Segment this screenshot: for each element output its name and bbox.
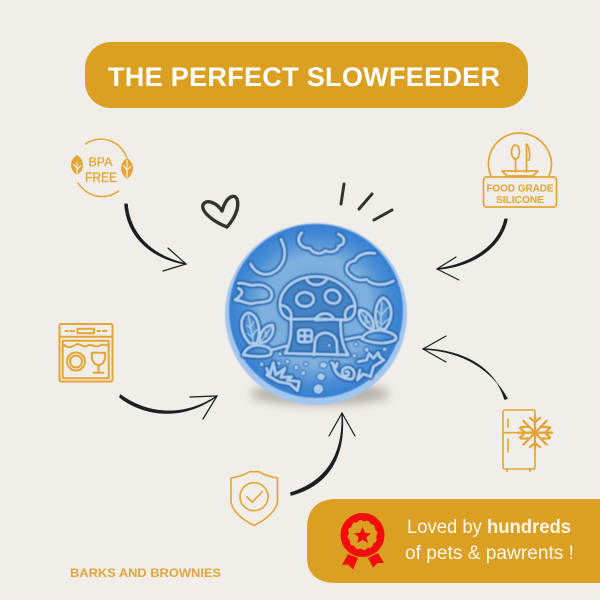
arrow: fridge to bowl: [423, 336, 508, 400]
callout: loved by hundreds: Loved by hundreds: [407, 517, 571, 538]
icon: food grade silicone: FOOD GRADE: [486, 182, 554, 194]
icon: BPA free: BPA: [88, 155, 112, 169]
title banner: [85, 42, 528, 108]
bowl: mushroom house slow feeder: [225, 223, 407, 405]
arrow: BPA to bowl: [124, 204, 186, 271]
callout: loved by hundreds: of pets & pawrents !: [405, 543, 574, 564]
arrow: food grade to bowl: [437, 219, 508, 280]
icon: red award badge: [342, 516, 384, 570]
arrow: dishwasher to bowl: [120, 394, 217, 419]
icon: dishwasher: [60, 324, 112, 382]
sparkle lines: [341, 184, 392, 220]
icon: food grade silicone: SILICONE: [496, 194, 544, 206]
icon: fridge with snowflake: [503, 410, 552, 472]
heart doodle: [203, 196, 238, 227]
icon: safety shield: [231, 472, 278, 526]
callout: loved by hundreds: [307, 499, 600, 583]
arrow: shield to bowl: [290, 413, 355, 496]
brand name: BARKS AND BROWNIES: [70, 568, 221, 580]
icon: BPA free: [71, 139, 133, 197]
title banner: THE PERFECT SLOWFEEDER: [108, 62, 500, 92]
bowl shadow: [250, 383, 390, 405]
icon: food grade silicone: [484, 133, 556, 207]
icon: BPA free: FREE: [85, 170, 117, 185]
